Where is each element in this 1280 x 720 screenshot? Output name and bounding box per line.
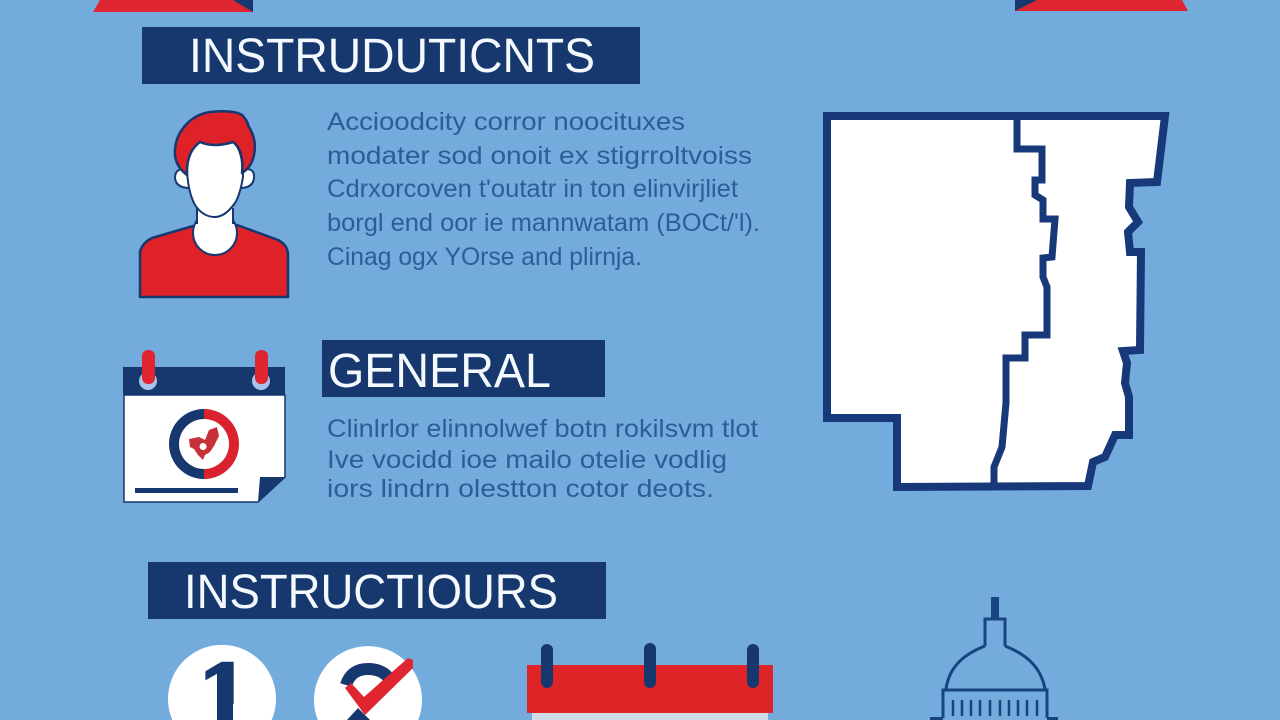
paragraph: general body text: Clinlrlor elinnolwef botn rokilsvm tlot [327,415,758,443]
paragraph: general body text: Ive vocidd ioe mailo otelie vodlig [327,446,727,474]
icon: person avatar [140,111,288,297]
paragraph: first body text: Accioodcity corror noocituxes [327,108,685,136]
icon: step number one [168,644,276,720]
icon: capitol building [930,597,1058,718]
paragraph: first body text: borgl end oor ie mannwatam (BOCt/'l). [327,209,760,237]
heading: instructions banner: INSTRUDUTICNTS [189,30,595,83]
top left ribbon fragment [93,0,253,12]
paragraph: first body text: modater sod onoit ex stigrroltvoiss [327,142,752,170]
paragraph: first body text [327,108,760,271]
icon: calendar with state badge [123,350,285,502]
icon: large calendar [527,643,773,720]
paragraph: first body text: Cinag ogx YOrse and plirnja. [327,243,642,271]
heading: instructions banner lower: INSTRUCTIOURS [184,566,558,619]
paragraph: general body text [327,415,758,503]
heading: general banner: GENERAL [328,345,551,398]
paragraph: general body text: iors lindrn olestton cotor deots. [327,475,714,503]
top right ribbon fragment [1015,0,1188,11]
paragraph: first body text: Cdrxorcoven t'outatr in ton elinvirjliet [327,175,738,203]
icon: state map with divided regions [827,116,1165,487]
icon: check mark badge [314,646,422,720]
